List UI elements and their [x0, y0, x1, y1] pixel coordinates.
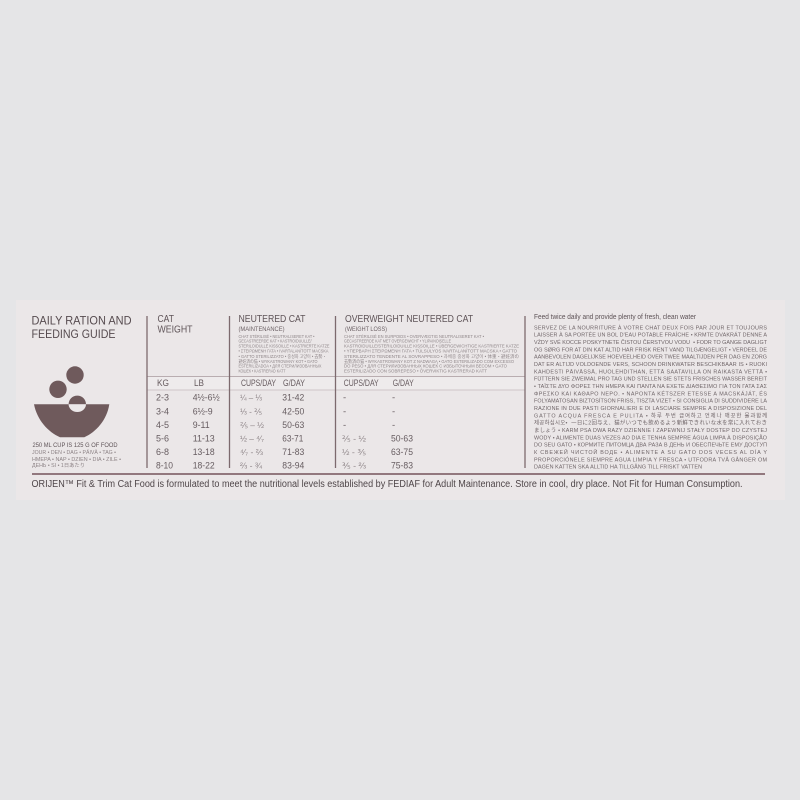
column: neutered cat: ESTERILIZADOA • ДЛЯ СТЕРИЛИЗОВАННЫХ	[238, 364, 322, 369]
column: neutered cat: 31-42	[282, 393, 304, 404]
multilingual feeding instructions: OG SØRG FOR AT DIN KAT ALTID HAR FRISK RENT VAND TILGÆNGELIGT • VERDEEL DE	[534, 347, 767, 353]
column: cat weight: 9-11	[193, 420, 210, 431]
title: DAILY RATION AND	[32, 314, 132, 328]
column: neutered cat: (MAINTENANCE)	[238, 326, 284, 333]
column: neutered cat: 83-94	[282, 461, 304, 472]
column: cat weight: 13-18	[193, 447, 215, 458]
column: neutered cat: CUPS/DAY	[241, 378, 276, 388]
column: overweight neutered cat: 50-63	[391, 434, 413, 445]
multilingual feeding instructions: К СВЕЖЕЙ ЧИСТОЙ ВОДЕ • ALIMENTE A SU GATO DOS VECES AL DÍA Y	[534, 448, 767, 456]
multilingual feeding instructions: DO SEU GATO • КОРМИТЕ ПИТОМЦА ДВА РАЗА В ДЕНЬ И ОБЕСПЕЧЬТЕ ЕМУ ДОСТУП	[534, 443, 767, 449]
multilingual feeding instructions: KAHDESTI PÄIVÄSSÄ, HUOLEHDITHAN, ETTÄ SAATAVILLA ON RAIKASTA VETTÄ •	[534, 368, 767, 375]
column: neutered cat: 避妊済の猫 • WYKASTROWANY KOT • GATO	[238, 358, 318, 365]
column: cat weight: 2-3	[156, 393, 169, 404]
multilingual feeding instructions: PROPORCIÓNELE SIEMPRE AGUA LIMPIA Y FRESCA • UTFODRA TVÅ GÅNGER OM	[534, 456, 768, 463]
column: cat weight: 6½-9	[193, 406, 213, 418]
column: cat weight: 6-8	[156, 447, 169, 458]
column: neutered cat: • GATTO STERILIZZATO • 중성화 고양이 • 去勢・	[238, 353, 326, 360]
column: cat weight: 3-4	[156, 406, 169, 418]
column: overweight neutered cat: ESTERILIZADO CON SOBREPESO • ÖVERVIKTIG KASTRERAD KATT	[344, 369, 487, 374]
column: overweight neutered cat: -	[392, 420, 395, 431]
column: neutered cat: КОШЕК • KASTRERAD KATT	[238, 369, 286, 374]
icon: food bowl with kibble	[34, 366, 109, 437]
column: neutered cat: ⅖ – ½	[240, 420, 264, 430]
cup measure note	[32, 443, 121, 469]
column: overweight neutered cat: -	[343, 393, 346, 404]
column: neutered cat: CHAT STÉRILISÉ • NEUTRALISERET KAT •	[238, 334, 315, 339]
column: overweight neutered cat: G/DAY	[393, 378, 414, 388]
column: neutered cat: ⅔ - ¾	[240, 461, 263, 471]
column: overweight neutered cat: ⅗ - ⅔	[342, 461, 366, 471]
column: neutered cat: 42-50	[282, 406, 304, 418]
column: overweight neutered cat: 75-83	[391, 461, 413, 472]
column: overweight neutered cat: • ΥΠΕΡΒΑΡΗ ΣΤΕΙΡΩΜΕΝΗ ΓΑΤΑ • TÚLSÚLYOS IVARTALANÍTOTT MACSKA • GATTO	[344, 349, 518, 354]
column: neutered cat: STERILOIDULLE KISSOILLE • KASTRIERTE KATZE	[238, 344, 330, 348]
column: cat weight: WEIGHT	[158, 324, 193, 336]
multilingual feeding instructions: DAT ER ALTIJD VOLDOENDE VERS, SCHOON DRINKWATER BESCHIKBAAR IS • RUOKI	[534, 362, 767, 368]
column: neutered cat: ⅓ - ⅖	[240, 406, 263, 416]
multilingual feeding instructions: WODY • ALIMENTE DUAS VEZES AO DIA E TENHA SEMPRE ÁGUA LIMPA À DISPOSIÇÃO	[534, 434, 767, 441]
multilingual feeding instructions: GATTO ACQUA FRESCA E PULITA • 하루 두번 급여하고 언제나 깨끗한 물과함께	[534, 411, 767, 419]
column: neutered cat: 71-83	[282, 447, 304, 458]
header band	[147, 377, 525, 390]
column: cat weight: 18-22	[193, 461, 215, 472]
multilingual feeding instructions: RAZIONE IN DUE PASTI GIORNALIERI E DI LASCIARE SEMPRE A DISPOSIZIONE DEL	[534, 406, 767, 412]
cup measure note: 250 ML CUP IS 125 G OF FOOD	[32, 443, 118, 449]
column: overweight neutered cat: 去勢済の猫 • WYKASTROWANY KOT Z NADWAGĄ • GATO ESTERILIZADO COM EXCESSO	[344, 358, 515, 365]
multilingual feeding instructions: VŽDY SVÉ KOCCE POSKYTNETE ČISTOU ČERSTVOU VODU • FODR TO GANGE DAGLIGT	[534, 338, 768, 346]
column: overweight neutered cat: -	[392, 406, 395, 418]
column: cat weight: CAT	[158, 313, 174, 325]
title	[32, 314, 132, 341]
multilingual feeding instructions: FÜTTERN SIE ZWEIMAL PRO TAG UND STELLEN SIE STETS FRISCHES WASSER BEREIT	[534, 376, 768, 383]
column: neutered cat: 50-63	[282, 420, 304, 431]
cup measure note: JOUR • DEN • DAG • PÄIVÄ • TAG •	[32, 449, 116, 456]
multilingual feeding instructions	[534, 324, 768, 471]
column: neutered cat: G/DAY	[283, 378, 305, 388]
multilingual feeding instructions: LAISSER À SA PORTÉE UN BOL D'EAU POTABLE FRAÎCHE • KRMTE DVAKRÁT DENNE A	[534, 332, 767, 339]
column: neutered cat	[238, 313, 330, 472]
multilingual feeding instructions: AANBEVOLEN DAGELIJKSE HOEVEELHEID OVER TWEE MAALTIJDEN PER DAG EN ZORG	[534, 355, 767, 361]
footer statement: ORIJEN™ Fit & Trim Cat Food is formulated to meet the nutritional levels established by FEDIAF for Adult Maintenance. Store in cool, dry place. Not Fit for Human Consumption.	[32, 479, 742, 490]
column: cat weight: LB	[194, 378, 204, 388]
multilingual feeding instructions: FOLYAMATOSAN BIZTOSÍTSON FRISS, TISZTA VIZET • SI CONSIGLIA DI SUDDIVIDERE LA	[534, 398, 767, 405]
column: overweight neutered cat: -	[343, 406, 346, 418]
column: neutered cat: 63-71	[282, 434, 303, 445]
column: cat weight: KG	[157, 378, 169, 388]
column: neutered cat: • ΣΤΕΙΡΩΜΕΝΗ ΓΑΤΑ • IVARTALANÍTOTT MACSKA	[238, 349, 329, 354]
column: neutered cat: ⁴⁄₇ - ⅔	[240, 447, 263, 457]
column: cat weight	[156, 313, 220, 472]
column: overweight neutered cat	[342, 313, 519, 472]
column: cat weight: 4-5	[156, 420, 169, 431]
column: neutered cat: ½ – ⁴⁄₇	[240, 434, 264, 444]
column: overweight neutered cat: -	[392, 393, 395, 404]
column: overweight neutered cat: KASTROIDUILLE/STERILOIDUILLE KISSOILLE • ÜBERGEWICHTIGE KASTRIERTE KATZE	[344, 344, 519, 348]
column: neutered cat: NEUTERED CAT	[238, 313, 306, 325]
column: neutered cat: ¼ – ⅓	[240, 393, 262, 403]
column: overweight neutered cat: CUPS/DAY	[344, 378, 379, 388]
multilingual feeding instructions: • ΤΑΪΣΤΕ ΔΥΟ ΦΟΡΕΣ ΤΗΝ ΗΜΕΡΑ ΚΑΙ ΠΑΝΤΑ ΝΑ ΕΧΕΤΕ ΔΙΑΘΕΣΙΜΟ ΓΙΑ ΤΟΝ ΓΑΤΑ ΣΑΣ	[534, 383, 768, 390]
column: neutered cat: GECASTREERDE KAT • KASTROIDUULLE/	[238, 338, 312, 344]
title: FEEDING GUIDE	[32, 327, 116, 341]
column: cat weight: 8-10	[156, 461, 173, 472]
column: overweight neutered cat: 63-75	[391, 447, 413, 458]
column: overweight neutered cat: (WEIGHT LOSS)	[345, 326, 387, 333]
multilingual feeding instructions: 제공하십시오• 一日に2回与え、猫がいつでも飲めるよう新鮮できれいな水を常に入れておき	[534, 419, 767, 427]
multilingual feeding instructions: SERVEZ DE LA NOURRITURE À VOTRE CHAT DEUX FOIS PAR JOUR ET TOUJOURS	[534, 324, 767, 331]
column: overweight neutered cat: STERILIZZATO TENDENTE AL SOVRAPPESO • 과체중 중성화 고양이 • 体重・避妊済の	[344, 353, 519, 360]
column: cat weight: 5-6	[156, 434, 169, 445]
column: overweight neutered cat: DO PESO • ДЛЯ СТЕРИЛИЗОВАННЫХ КОШЕК С ИЗБЫТОЧНЫМ ВЕСОМ • GATO	[344, 364, 508, 369]
column: overweight neutered cat: ⅖ - ½	[342, 434, 366, 444]
panel: feeding guide label	[16, 300, 785, 500]
column: overweight neutered cat: -	[343, 420, 346, 431]
column: overweight neutered cat: CHAT STÉRILISÉ EN SURPOIDS • OVERVÆGTIG NEUTRALISERET KAT •	[344, 334, 484, 339]
feeding instructions heading: Feed twice daily and provide plenty of fresh, clean water	[534, 314, 697, 321]
cup measure note: ΗΜΕΡΑ • NAP • DZIEN • DIA • ZILE •	[32, 457, 121, 463]
multilingual feeding instructions: ましょう • KARM PSA DWA RAZY DZIENNIE I ZAPEWNIJ STAŁY DOSTEP DO CZYSTEJ	[534, 427, 767, 434]
column: overweight neutered cat: GECASTREERDE KAT MET OVERGEWICHT • YLIPAINOISELLE	[344, 338, 451, 344]
multilingual feeding instructions: DAGEN KATTEN SKA ALLTID HA TILLGÅNG TILL FRISKT VATTEN	[534, 464, 702, 471]
column: overweight neutered cat: ½ - ⅗	[342, 447, 367, 457]
cup measure note: ДЕНЬ • SI • 1日あたり	[32, 462, 85, 469]
column: cat weight: 4½-6½	[193, 393, 220, 404]
column: overweight neutered cat: OVERWEIGHT NEUTERED CAT	[345, 313, 473, 325]
multilingual feeding instructions: ΦΡΕΣΚΟ ΚΑΙ ΚΑΘΑΡΟ ΝΕΡΟ. • NAPONTA KÉTSZER ETESSE A MACSKÁJÁT, ÉS	[534, 390, 767, 397]
column: cat weight: 11-13	[193, 434, 215, 445]
